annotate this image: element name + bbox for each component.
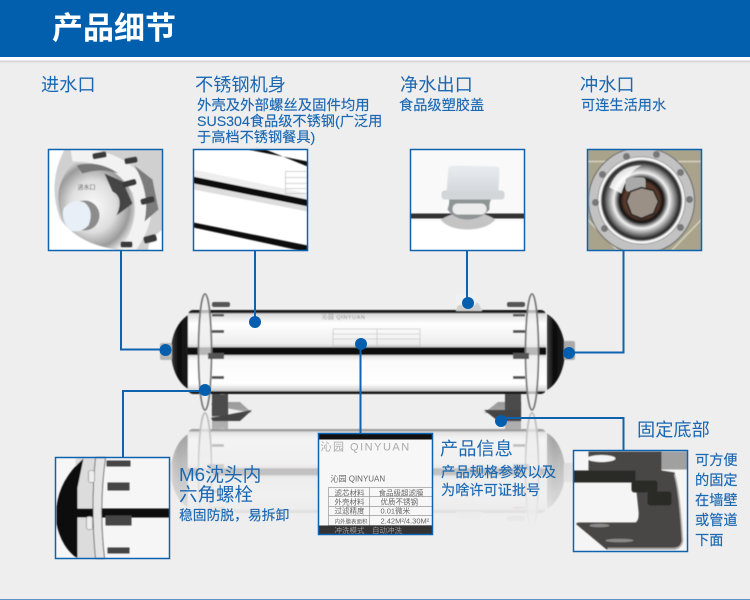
label: flush outlet: 冲水口 <box>580 75 635 95</box>
filter unit: 沁园 QINYUAN <box>322 313 366 321</box>
label: M6 hex bolts: M6沈头内 <box>179 464 261 485</box>
label: M6 hex bolts <box>179 464 289 523</box>
thumbnail: product info: 沁园 QINYUAN <box>330 474 385 484</box>
label: purified water outlet: 净水出口 <box>400 75 473 95</box>
filter reflection <box>170 402 572 513</box>
label: product information <box>440 439 556 499</box>
label: purified water outlet <box>399 75 484 114</box>
thumbnail: product info: 2.42M²/4.30M² <box>380 516 430 526</box>
thumbnail: inlet <box>48 149 162 250</box>
thumbnail: product info <box>318 434 432 535</box>
thumbnail: product info: 滤芯材料 <box>334 488 365 498</box>
label: M6 hex bolts: 稳固防脱，易拆卸 <box>179 508 289 523</box>
label: mounting description: 在墙壁 <box>695 493 738 509</box>
thumbnail: mounting bracket <box>574 450 688 552</box>
thumbnail: flush outlet <box>588 148 702 254</box>
label: water inlet: 进水口 <box>41 75 96 95</box>
thumbnail: product info: 沁园 QINYUAN <box>320 440 411 454</box>
label: purified water outlet: 食品级塑胶盖 <box>399 97 484 114</box>
thumbnail: product info: 食品级超滤膜 <box>378 488 424 498</box>
label: stainless steel body: 外壳及外部螺丝及固件均用 <box>197 97 370 114</box>
label: flush outlet <box>580 75 666 114</box>
label: mounting description: 下面 <box>695 533 723 549</box>
label: product information: 为啥许可证批号 <box>441 483 540 499</box>
label: mounting description: 的固定 <box>695 473 738 489</box>
label: M6 hex bolts: 六角螺栓 <box>179 484 253 505</box>
thumbnail: product info: 内外膜表面积 <box>334 518 368 526</box>
thumbnail: outlet cap <box>410 150 524 250</box>
thumbnail: product info: 外壳材料 <box>334 496 365 506</box>
thumbnail: product info: 优质不锈钢 <box>380 496 418 506</box>
label: mounting description: 可方便 <box>695 453 738 469</box>
label: stainless steel body <box>195 75 382 146</box>
header banner <box>0 0 750 64</box>
label: product information: 产品信息 <box>440 439 513 459</box>
label: mounting description: 或管道 <box>695 513 738 529</box>
label: mounting base: 固定底部 <box>637 420 710 440</box>
connector lines <box>121 251 624 457</box>
label: product information: 产品规格参数以及 <box>441 464 556 481</box>
thumbnail: product info: 冲洗模式 自动冲洗 <box>334 525 402 535</box>
bottom rule <box>0 599 750 600</box>
thumbnail: hex bolts <box>56 458 170 558</box>
label: stainless steel body: SUS304食品级不锈钢(广泛用 <box>197 113 382 130</box>
thumbnail: inlet: 进水口 <box>78 184 96 192</box>
thumbnail: product info: 0.01微米 <box>380 506 411 516</box>
title: 产品细节 <box>52 11 176 46</box>
thumbnail: steel body <box>194 150 308 250</box>
thumbnail: product info: 过滤精度 <box>334 506 365 516</box>
label: stainless steel body: 于高档不锈钢餐具) <box>197 129 315 146</box>
connector dots <box>160 297 575 427</box>
label: flush outlet: 可连生活用水 <box>581 98 666 114</box>
label: mounting description <box>695 453 738 549</box>
label: stainless steel body: 不锈钢机身 <box>195 75 286 95</box>
filter unit <box>160 294 575 421</box>
